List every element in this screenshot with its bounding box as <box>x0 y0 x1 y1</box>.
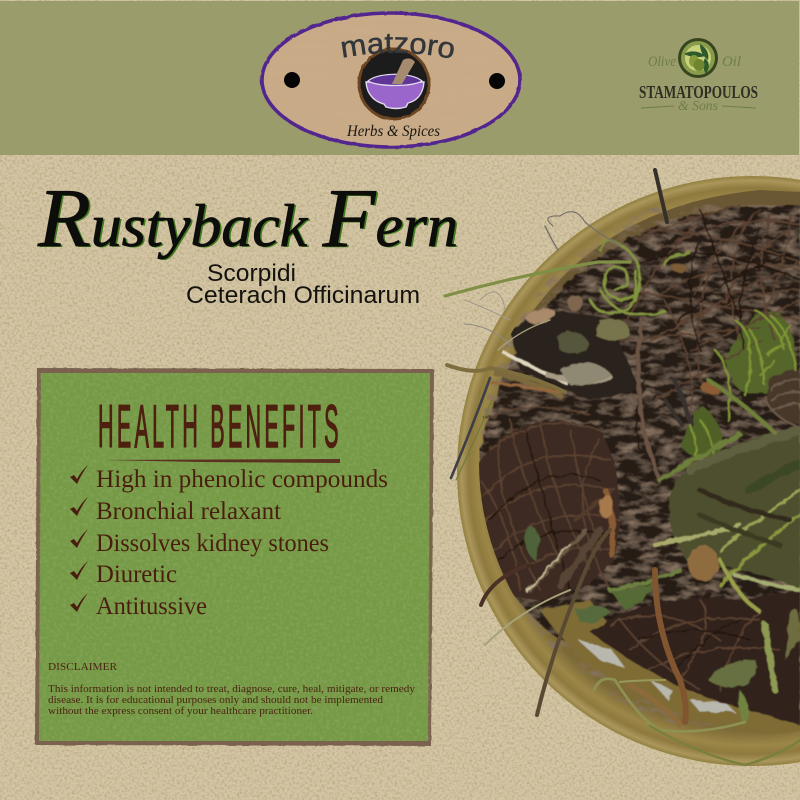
green curl <box>590 241 690 315</box>
benefit 5: Antitussive <box>96 593 207 620</box>
disclaimer text: This information is not intended to treat, diagnose, cure, heal, mitigate, or remedy <box>48 683 416 695</box>
brand name: STAMATOPOULOS <box>639 82 758 102</box>
title black text: Rustyback Fern <box>37 172 458 265</box>
white plate showing <box>578 638 737 714</box>
curved brown leaf <box>655 570 686 722</box>
logo wordmark <box>342 53 453 59</box>
common name: Scorpidi <box>207 260 296 287</box>
logo: matzoro: matzoro <box>341 34 454 58</box>
benefit 2: Bronchial relaxant <box>96 498 281 525</box>
dark stick <box>655 170 667 222</box>
logo mortar and pestle <box>366 58 424 108</box>
benefit list <box>70 465 388 620</box>
logo: Stamatopoulos olive oil <box>639 38 758 114</box>
disclaimer text: without the express consent of your healthcare practitioner. <box>48 705 313 717</box>
panel: health benefits <box>35 368 434 746</box>
title green shadow: Rustyback Fern <box>39 173 460 266</box>
header band <box>0 1 799 155</box>
disclaimer heading: DISCLAIMER <box>48 661 118 673</box>
bowl interior <box>479 204 800 730</box>
olive emblem <box>678 38 718 78</box>
soil <box>590 590 800 725</box>
bowl photograph <box>445 170 800 766</box>
Olive label: Olive <box>648 54 676 70</box>
and sons: & Sons <box>678 99 719 114</box>
panel border <box>35 368 434 746</box>
pointed stalk <box>537 530 610 715</box>
olive leaves <box>525 527 800 725</box>
logo wood plaque <box>262 13 520 147</box>
pale fern fronds <box>690 310 795 460</box>
root ball left <box>472 421 620 600</box>
tan leaf <box>447 365 565 392</box>
bowl floor lower side <box>540 600 800 738</box>
tan bits <box>525 263 722 581</box>
logo dark medallion <box>359 49 429 119</box>
logo right hole <box>489 73 505 89</box>
green patch right <box>670 431 800 590</box>
title <box>37 172 460 266</box>
panel green fill <box>39 373 430 741</box>
tan thick stems <box>490 316 694 594</box>
logo: matzoro <box>260 10 522 150</box>
latin name: Ceterach Officinarum <box>186 282 420 309</box>
heading underline <box>104 459 340 463</box>
benefit 4: Diuretic <box>96 561 177 588</box>
disclaimer text: disease. It is for educational purposes only and should not be implemented <box>48 694 384 706</box>
hanging brown root <box>481 566 525 605</box>
bowl rim <box>457 176 800 766</box>
long pale green stem <box>445 262 630 296</box>
Oil label: Oil <box>722 54 741 70</box>
dark left hollow <box>510 312 640 400</box>
dark root strands <box>490 210 800 670</box>
stems overhanging the rim <box>445 170 800 765</box>
green ring stem <box>594 679 745 731</box>
dark stalk on rim <box>451 378 490 478</box>
fibrous base <box>475 205 800 730</box>
bowl top inner wall <box>520 190 800 330</box>
coiled dark root <box>765 380 800 428</box>
logo left hole <box>284 72 300 88</box>
heading: HEALTH BENEFITS <box>98 392 342 460</box>
disclaimer text <box>48 683 416 717</box>
coiled root mass right <box>765 369 800 425</box>
logo tagline: Herbs & Spices <box>346 123 440 140</box>
benefit 3: Dissolves kidney stones <box>96 530 329 557</box>
benefit 1: High in phenolic compounds <box>96 466 388 493</box>
green stems and leaves lower right <box>610 380 800 690</box>
grey wisps <box>548 212 620 245</box>
fern green right <box>725 311 795 394</box>
brown root strands <box>470 205 800 690</box>
